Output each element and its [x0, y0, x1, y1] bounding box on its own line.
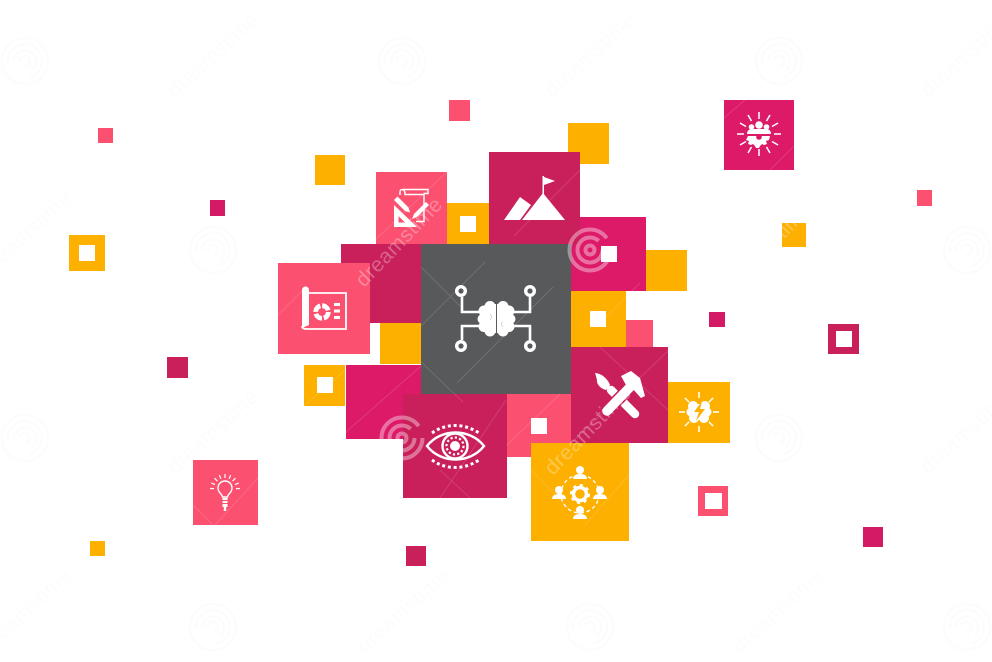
panel: central brain tile — [421, 244, 571, 394]
icon: notepad, ruler and pencils — [394, 190, 429, 227]
watermark text: dreamstime — [726, 201, 814, 290]
panel: amber block with white square left — [304, 365, 345, 406]
watermark diagonal lines — [193, 100, 794, 525]
faint background watermark text: dreamstime — [163, 385, 264, 479]
icon: light bulb with rays — [210, 474, 240, 511]
panel: amber block with white square right — [571, 291, 626, 347]
panel: amber block left — [380, 323, 421, 364]
faint background watermark text: dreamstime — [353, 564, 454, 658]
icon: mountain with flag — [504, 176, 565, 220]
faint background watermark text: dreamstime — [163, 8, 264, 102]
panel: amber block top right — [568, 123, 609, 164]
panel: crimson block left — [341, 244, 421, 323]
panel: magenta block lower left — [346, 365, 422, 439]
watermark spirals over the tiles — [382, 230, 610, 458]
icon: gear surrounded by people — [552, 466, 607, 519]
panel: magenta block with white square — [571, 217, 646, 291]
icon: brain with lightning bolt — [679, 392, 719, 432]
panel: pink block right — [626, 320, 653, 347]
watermark text — [351, 193, 814, 479]
watermark text: dreamstime — [351, 193, 447, 291]
icon: people over gear with rays — [737, 112, 781, 156]
hollow square: amber left — [69, 235, 105, 271]
panel: teamwork tile — [531, 443, 629, 541]
panel: drafting tile — [376, 172, 447, 244]
panel: tools tile — [571, 347, 668, 443]
panel: amber block with white square top — [447, 203, 489, 244]
icon: blueprint — [302, 286, 346, 329]
icon: hammer and brush — [595, 371, 645, 414]
faint background watermark text: dreamstime — [540, 8, 641, 102]
panel: light bulb tile — [193, 460, 258, 525]
icon: brain with circuit nodes — [457, 287, 534, 350]
hollow square: crimson right — [828, 324, 859, 354]
scattered small squares — [90, 100, 932, 566]
panel: pink block with white square bottom — [507, 394, 572, 457]
faint background watermark text: dreamstime — [728, 564, 829, 658]
hollow square: pink lower right — [698, 486, 728, 516]
panel: eye tile — [403, 394, 507, 498]
icon: eye with dotted lashes — [427, 426, 484, 468]
panel: blueprint tile — [278, 263, 370, 354]
panel: mountain tile — [489, 152, 580, 244]
panel: idea brain tile — [668, 382, 730, 443]
panel: team gear tile — [724, 100, 794, 170]
watermark text: dreamstime — [540, 381, 636, 479]
panel: amber block right — [646, 250, 687, 291]
